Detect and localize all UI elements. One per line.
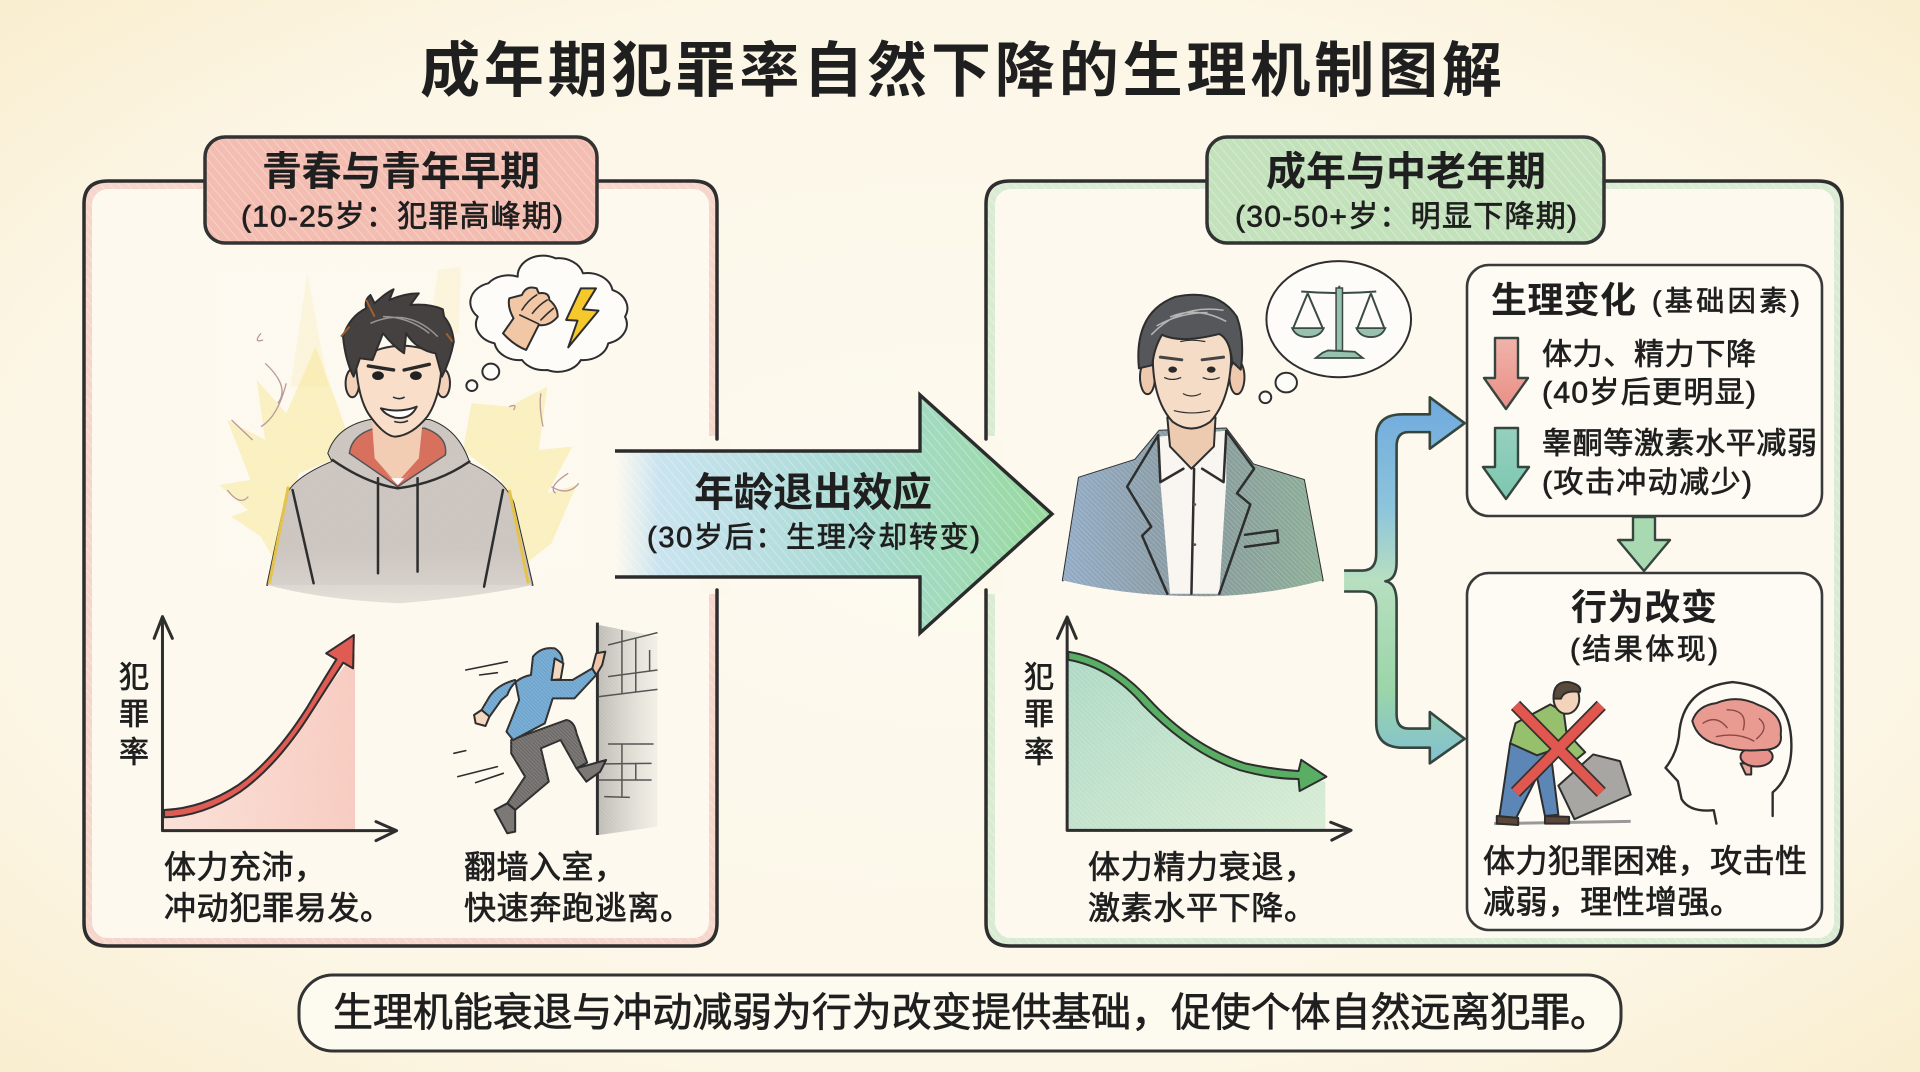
box: behaviour change: 行为改变 [1571,586,1717,628]
box: physiological change: 体力、精力下降 [1542,338,1756,372]
axis label: 罪 [119,698,149,732]
panel heading: youth: 青春与青年早期 [262,150,540,194]
panel heading: youth [205,137,597,243]
conclusion banner: 生理机能衰退与冲动减弱为行为改变提供基础，促使个体自然远离犯罪。 [333,991,1610,1035]
icon: crossed-out worker [1494,682,1631,825]
icon: brain in head [1666,682,1791,824]
axis label [119,662,149,770]
axis label: 犯 [119,662,149,694]
head [1138,295,1244,429]
icon: lightning [566,288,599,347]
box: physiological change: 睾酮等激素水平减弱 [1542,428,1817,460]
panel heading: adulthood [1207,137,1604,243]
box: physiological change: (攻击冲动减少) [1542,466,1752,500]
axis label: 罪 [1024,698,1054,732]
caption: decline [1088,849,1316,926]
head [341,289,454,437]
illustration: middle-aged man [1057,261,1465,840]
climber hoodie [474,648,605,740]
hoodie [267,418,532,603]
shaded area [163,653,355,830]
panel heading: adulthood: 成年与中老年期 [1266,150,1546,194]
wall [597,623,658,835]
box: physiological change [1467,265,1822,516]
caption: climbing: 快速奔跑逃离。 [464,890,692,926]
axes [1057,617,1351,840]
axis label: 犯 [1024,662,1054,694]
axis label: 率 [1024,736,1054,770]
icon: red down arrow [1484,338,1528,409]
panel: adulthood [299,137,1843,1051]
caption: climbing [464,849,692,926]
caption: energy: 冲动犯罪易发。 [164,890,392,926]
box: behaviour change: (结果体现) [1570,633,1718,666]
panel: youth [83,137,730,947]
caption: decline: 激素水平下降。 [1088,890,1316,926]
arrow: age exit effect: (30岁后：生理冷却转变) [647,521,980,554]
caption: decline: 体力精力衰退， [1088,849,1316,885]
axis label [1024,662,1054,770]
panel heading: youth: (10-25岁：犯罪高峰期) [241,200,563,234]
chart: crime rate falling [1057,617,1351,840]
energy aura [219,267,581,570]
speed lines [454,662,507,783]
illustration: energetic young man [219,256,627,603]
box: behaviour change: 减弱，理性增强。 [1483,884,1742,920]
title: 成年期犯罪率自然下降的生理机制图解 [420,38,1502,104]
chart: crime rate rising [154,617,397,841]
falling curve [1068,652,1326,791]
box: physiological change: (基础因素) [1652,286,1800,316]
axes [154,617,397,841]
shaded area [1067,655,1325,830]
box: behaviour change [1467,573,1822,930]
icon: balance scales [1292,286,1385,358]
bracket arrow [1344,397,1465,763]
arrow: box connector [1618,517,1670,571]
arrow: age exit effect: 年龄退出效应 [694,471,932,515]
box: physiological change: 生理变化 [1491,280,1636,320]
box: behaviour change: 体力犯罪困难，攻击性 [1483,843,1807,879]
icon: teal down arrow [1483,428,1529,499]
rising curve [164,635,354,817]
conclusion banner [299,975,1621,1051]
illustration: climbing a wall [454,623,658,835]
box: physiological change: (40岁后更明显) [1542,376,1756,410]
jacket [1063,417,1323,596]
caption: energy [164,849,392,926]
caption: energy: 体力充沛， [164,849,326,885]
icon: fist [503,287,558,350]
arrow: age exit effect [615,395,1052,633]
caption: climbing: 翻墙入室， [464,849,626,885]
axis label: 率 [119,736,149,770]
thought bubble: scales [1259,261,1411,403]
climber legs [495,720,606,833]
panel heading: adulthood: (30-50+岁：明显下降期) [1235,200,1577,234]
thought bubble: fist and lightning [466,256,627,391]
